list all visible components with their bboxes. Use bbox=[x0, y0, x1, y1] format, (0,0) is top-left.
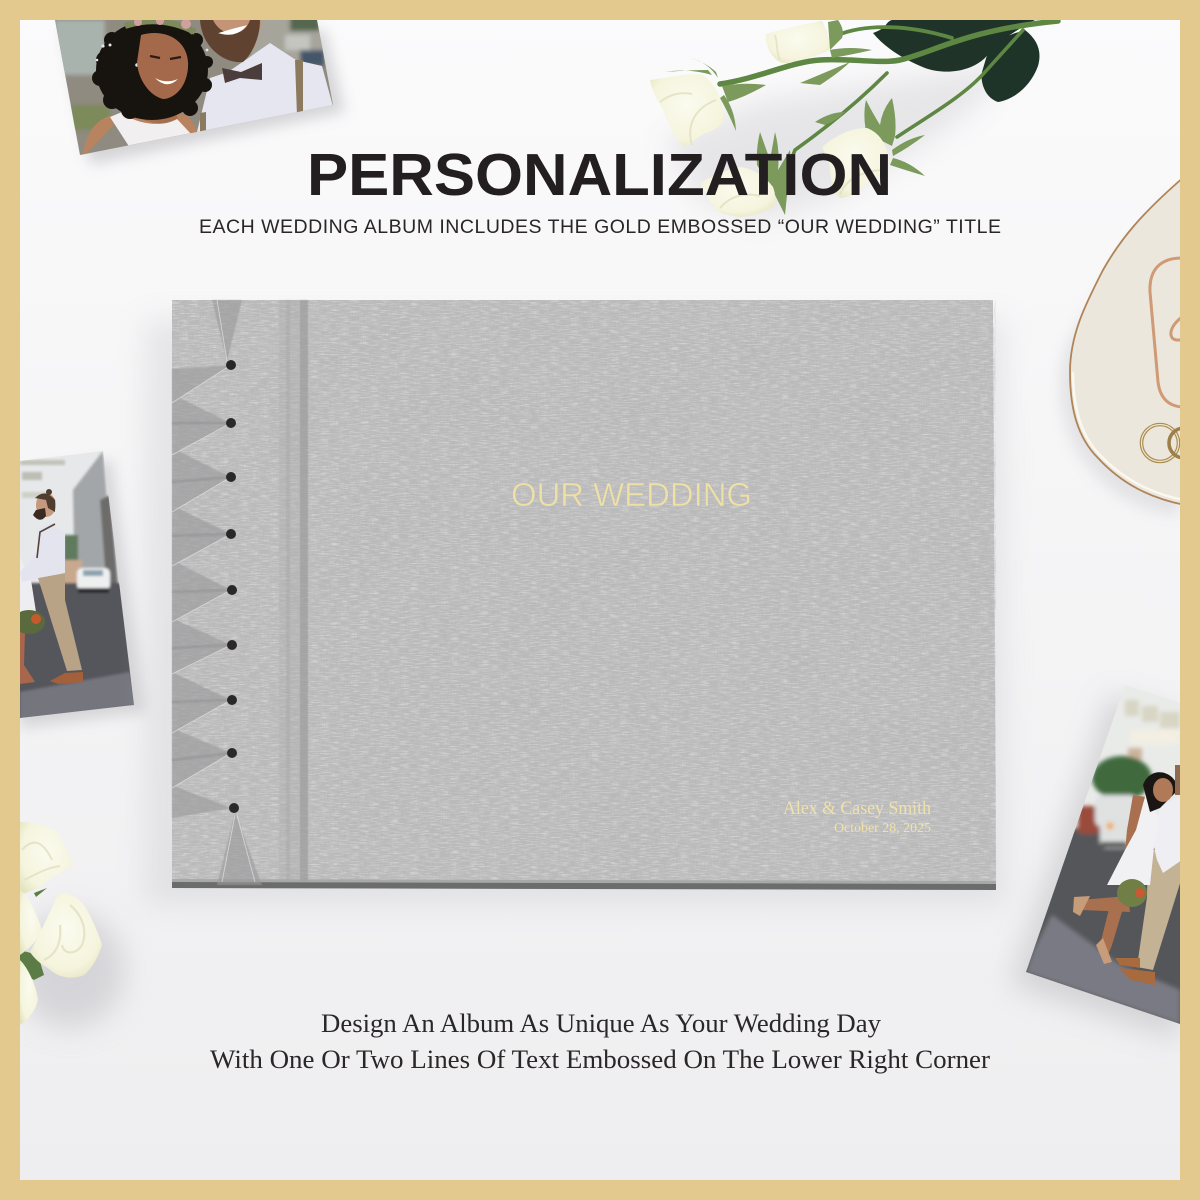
man's trousers bbox=[1137, 850, 1182, 970]
woman's arm bbox=[1125, 795, 1145, 850]
white car bbox=[77, 568, 110, 593]
woman's curly hair bbox=[92, 20, 213, 120]
man's shirt bbox=[196, 43, 334, 136]
stems bbox=[720, 21, 1058, 175]
bouquet bbox=[1117, 879, 1147, 907]
beige heels bbox=[1073, 896, 1112, 964]
man's face and beard bbox=[213, 20, 262, 33]
leaves bbox=[20, 888, 47, 980]
rose bloom B bbox=[766, 21, 830, 63]
wedding album bbox=[145, 300, 1005, 905]
dress bbox=[20, 580, 36, 612]
suspender bbox=[37, 524, 55, 558]
floral crown bbox=[125, 21, 195, 32]
roses: top right bouquet bbox=[650, 20, 1058, 220]
photo: couple portrait, top left bbox=[55, 20, 348, 168]
woman's face bbox=[137, 33, 188, 99]
title: PERSONALIZATION bbox=[307, 142, 892, 208]
embossed title: OUR WEDDING bbox=[511, 477, 752, 514]
man's trousers bbox=[38, 573, 82, 671]
sepals bbox=[665, 20, 925, 215]
album page edge bbox=[172, 878, 996, 890]
woman's face bbox=[1153, 778, 1173, 802]
dark leaves bbox=[873, 20, 1039, 102]
photo: couple on street, right bbox=[1010, 680, 1185, 1040]
album shadow bbox=[145, 320, 1005, 905]
bouquet bbox=[20, 610, 45, 634]
ribbon binding bbox=[172, 300, 262, 885]
bloom 2 bbox=[20, 890, 42, 955]
decoration: ring dish bbox=[1058, 179, 1180, 514]
subtitle: EACH WEDDING ALBUM INCLUDES THE GOLD EMBOSSED “OUR WEDDING” TITLE bbox=[199, 216, 1001, 238]
man's head bbox=[1175, 765, 1183, 795]
suspenders bbox=[295, 60, 303, 116]
bloom 4 bbox=[20, 960, 38, 1025]
description line 2: With One Or Two Lines Of Text Embossed On The Lower Right Corner bbox=[210, 1044, 990, 1074]
woman's leg and shoe bbox=[20, 632, 35, 684]
photo: couple on street, left bbox=[10, 445, 146, 728]
linen cover bbox=[172, 300, 996, 882]
rose bloom C bbox=[822, 128, 889, 198]
rose bloom A bbox=[650, 74, 725, 147]
man's shoes bbox=[1115, 958, 1155, 985]
description line 1: Design An Album As Unique As Your Wedding Day bbox=[321, 1008, 882, 1038]
bow tie bbox=[222, 63, 262, 83]
bloom 3 bbox=[30, 893, 102, 978]
man's shirt bbox=[20, 533, 65, 582]
embossed names: Alex & Casey Smith bbox=[783, 799, 931, 819]
bloom 1 bbox=[20, 822, 73, 895]
shoes bbox=[50, 672, 83, 684]
man's shirt bbox=[1154, 796, 1180, 873]
rose bloom D bbox=[700, 167, 775, 217]
head and beard bbox=[36, 493, 56, 517]
woman's standing leg bbox=[1100, 905, 1124, 958]
roses: bottom left bouquet bbox=[15, 822, 125, 1028]
punched holes bbox=[226, 360, 239, 813]
neck bbox=[142, 115, 178, 124]
crown flowers bbox=[134, 20, 191, 29]
hinge groove bbox=[279, 300, 308, 881]
woman's dress bbox=[1107, 793, 1160, 885]
cars bbox=[1078, 795, 1137, 848]
woman's kicked leg bbox=[1080, 896, 1130, 912]
soft shadow bbox=[665, 60, 1020, 220]
embossed date: October 28, 2025 bbox=[834, 821, 931, 836]
woman's shoulders bbox=[82, 114, 198, 154]
woman's hair bbox=[1143, 772, 1178, 812]
hair sparkles bbox=[96, 44, 208, 67]
glitter bbox=[1026, 915, 1180, 1024]
dress bbox=[110, 112, 192, 148]
